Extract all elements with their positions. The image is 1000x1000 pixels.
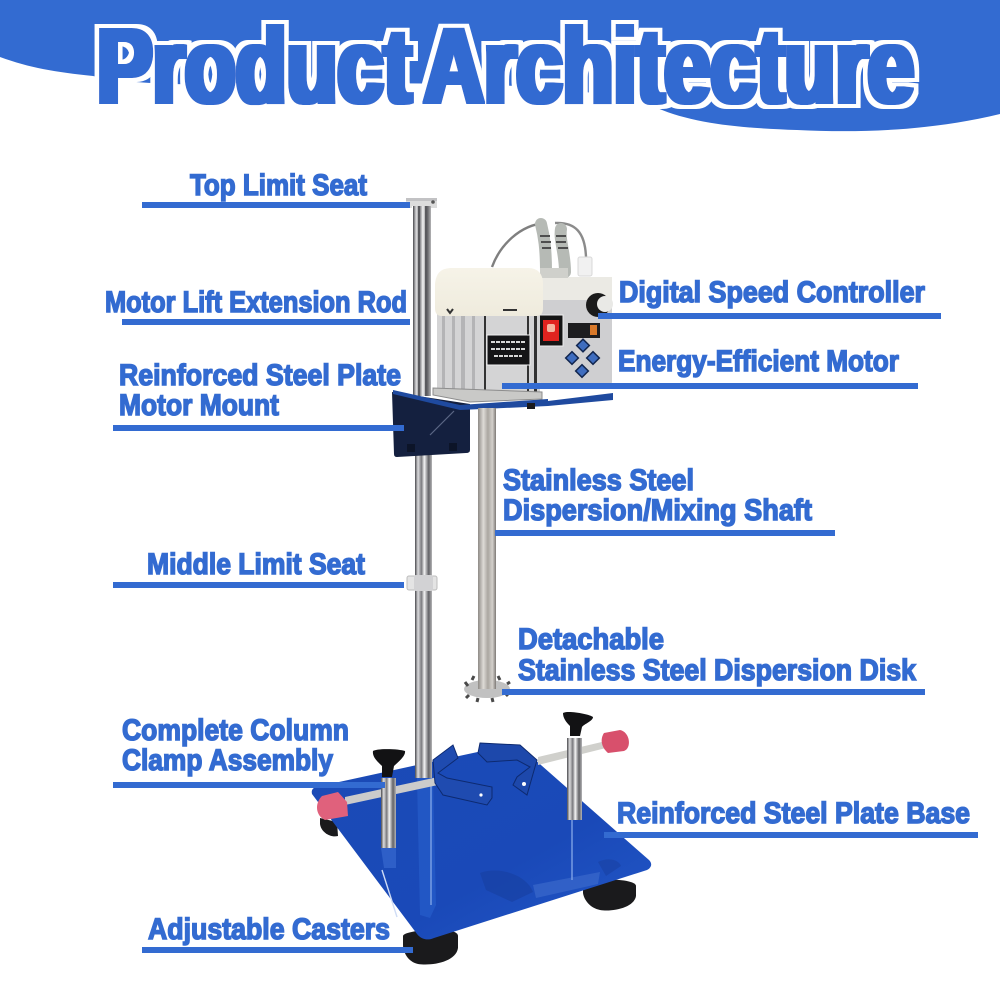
header banner: [0, 0, 1000, 131]
keypad: [566, 339, 599, 377]
cables: [492, 223, 592, 276]
label: Reinforced Steel Plate Motor Mount: Reinforced Steel Plate: [119, 359, 401, 392]
column rod upper: [413, 206, 431, 396]
label: Energy-Efficient Motor: Energy-Efficient Motor: [618, 345, 899, 378]
motor mount plate: [393, 388, 613, 410]
label: Detachable Stainless Steel Dispersion Disk: Stainless Steel Dispersion Disk: [518, 654, 916, 687]
label: Detachable Stainless Steel Dispersion Disk: [502, 623, 925, 695]
label: Adjustable Casters: Adjustable Casters: [148, 913, 390, 946]
label: Digital Speed Controller: [598, 276, 941, 319]
label: Top Limit Seat: Top Limit Seat: [190, 169, 367, 202]
right rubber tip: [602, 730, 629, 753]
label: Reinforced Steel Plate Motor Mount: Motor Mount: [119, 389, 279, 422]
digital display: [568, 323, 600, 338]
middle limit seat: [407, 575, 437, 591]
power switch: [539, 315, 563, 346]
left knob: [373, 749, 405, 777]
base reflections: [382, 778, 621, 918]
label: Middle Limit Seat: Middle Limit Seat: [147, 548, 365, 581]
dispersion disk: [464, 675, 510, 702]
label: Digital Speed Controller: Digital Speed Controller: [619, 276, 925, 309]
product: stirrer stand: [312, 198, 651, 964]
label: Complete Column Clamp Assembly: [113, 714, 385, 788]
label: Top Limit Seat: [142, 169, 410, 208]
label: Detachable Stainless Steel Dispersion Disk: Detachable: [518, 623, 664, 656]
right post: [567, 738, 582, 820]
left post: [381, 778, 396, 868]
label: Motor Lift Extension Rod: Motor Lift Extension Rod: [105, 286, 407, 319]
label: Reinforced Steel Plate Motor Mount: [113, 359, 404, 431]
label: Complete Column Clamp Assembly: Clamp Assembly: [122, 744, 333, 777]
clamp arms: [345, 741, 606, 805]
left rubber tip: [317, 792, 348, 820]
controller box: [539, 268, 613, 385]
casters behind base: [320, 818, 636, 964]
label: Stainless Steel Dispersion/Mixing Shaft: Dispersion/Mixing Shaft: [503, 494, 812, 527]
right knob: [563, 712, 593, 736]
label: Stainless Steel Dispersion/Mixing Shaft: [495, 464, 835, 536]
label: Middle Limit Seat: [113, 548, 404, 588]
label: Stainless Steel Dispersion/Mixing Shaft: Stainless Steel: [503, 464, 694, 497]
label: Complete Column Clamp Assembly: Complete Column: [122, 714, 349, 747]
column rod lower: [415, 455, 432, 778]
steel base plate: [312, 750, 651, 939]
column clamp assembly: [317, 712, 629, 868]
speed knob: [586, 293, 613, 317]
label: Energy-Efficient Motor: [502, 345, 918, 389]
motor: [435, 268, 543, 392]
motor mount bracket: [392, 392, 470, 457]
top limit seat: [406, 198, 437, 208]
mixing shaft: [478, 403, 535, 678]
